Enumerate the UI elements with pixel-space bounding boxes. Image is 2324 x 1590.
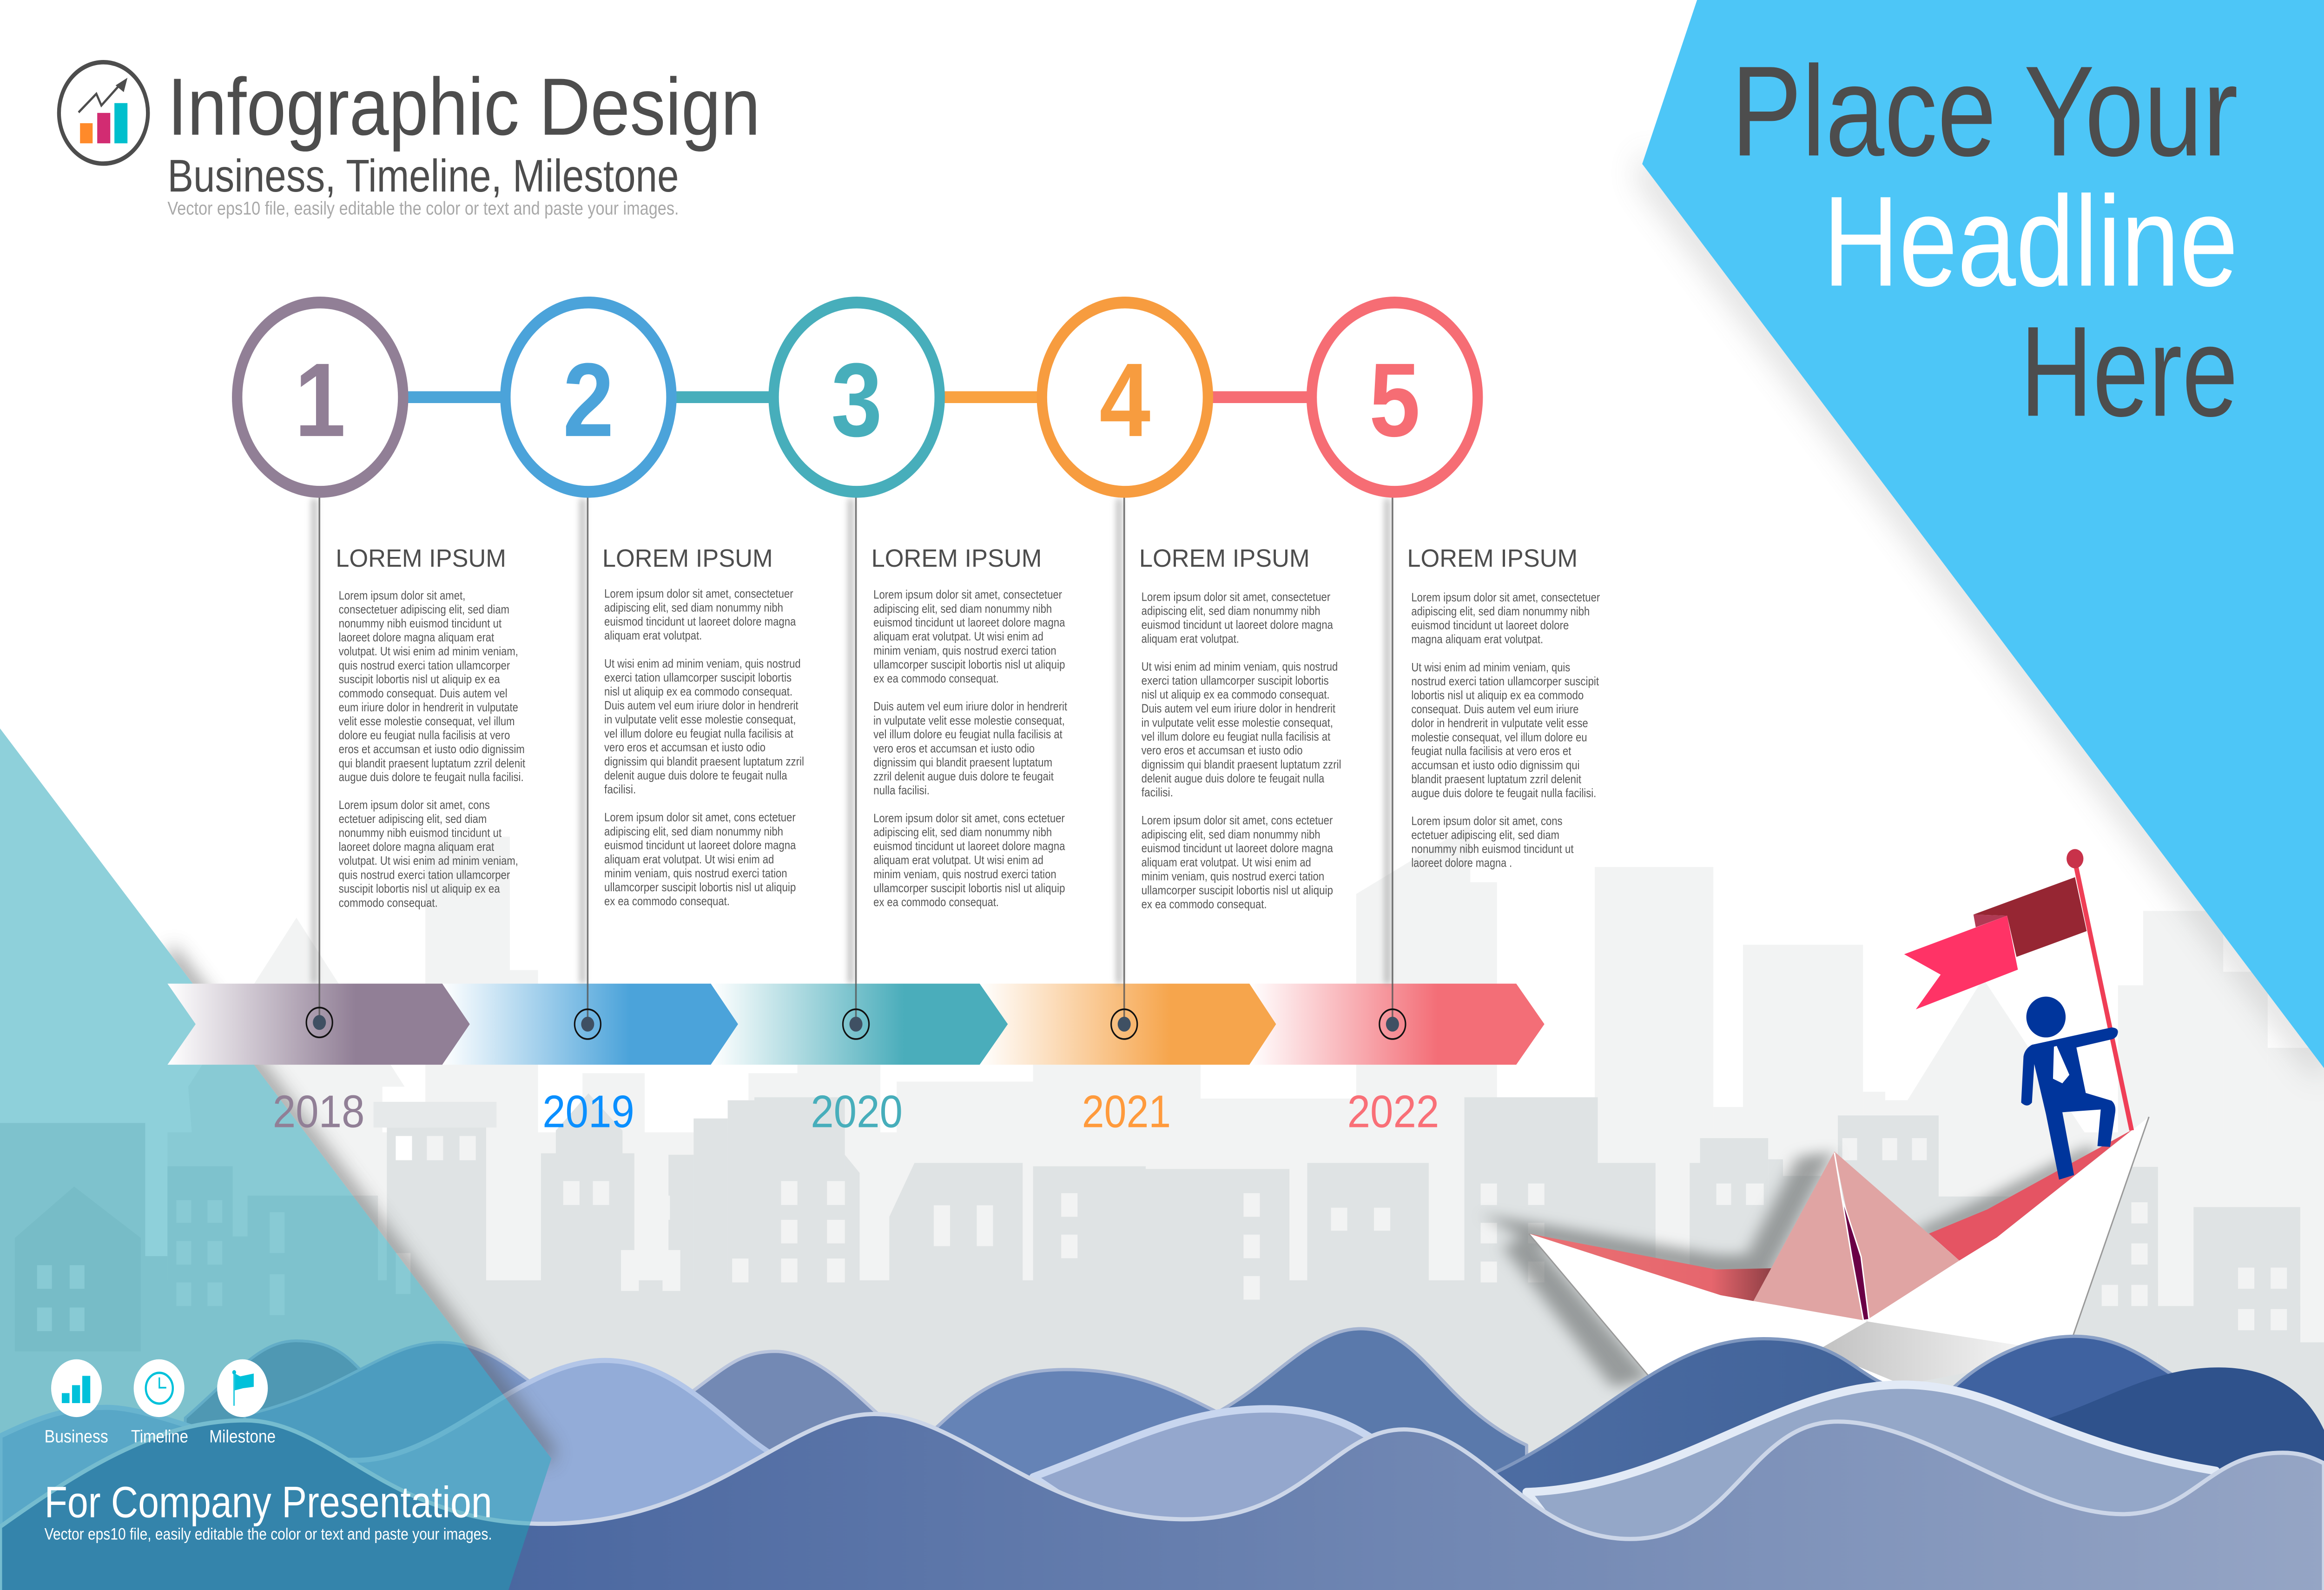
text column 5: dolor in hendrerit in vulputate velit esse [1411,717,1588,730]
text column 5: molestie consequat, vel illum dolore eu [1411,731,1587,744]
text column 1: volutpat. Ut wisi enim ad minim veniam, [339,645,518,658]
headline: Here [2020,300,2238,444]
text column 1: quis nostrud exerci tation ullamcorper [339,868,510,882]
paper boat, flag and figure [1482,849,2149,1388]
text column 4: aliquam erat volutpat. Ut wisi enim ad [1142,856,1311,869]
teal corner panel [0,729,551,1590]
text column 4: euismod tincidunt ut laoreet dolore magna [1142,618,1333,632]
text column 5: accumsan et iusto odio dignissim qui [1411,759,1580,772]
text column 4: Ut wisi enim ad minim veniam, quis nostrud [1142,660,1338,674]
text column 1: commodo consequat. [339,896,438,910]
text column 1: dolore eu feugiat nulla facilisis at vero [339,729,510,742]
year labels [273,1086,1439,1137]
text column 5: blandit praesent luptatum zzril delenit [1411,773,1581,786]
text column 2: Lorem ipsum dolor sit amet, consectetuer [604,587,793,601]
text column 4: dignissim qui blandit praesent luptatum zzril [1142,758,1341,771]
vertical line shadows [314,498,1387,984]
text column 3: ex ea commodo consequat. [873,672,999,685]
text column 2: Ut wisi enim ad minim veniam, quis nostrud [604,657,801,670]
headline panel shadow [1642,164,2324,1068]
boat: sail folds [1753,1152,1863,1320]
title: Infographic Design [167,61,760,152]
flag pole [2075,864,2132,1130]
text column 5: LOREM IPSUM [1407,544,1578,572]
text column 3: Lorem ipsum dolor sit amet, consectetuer [873,588,1062,602]
text column 1: suscipit lobortis nisl ut aliquip ex ea [339,882,500,895]
icon: business bars [51,1359,102,1417]
text column 1: eum iriure dolor in hendrerit in vulputate [339,701,518,714]
milestone circle 3 [774,303,940,492]
text column 4: ex ea commodo consequat. [1142,898,1267,911]
text column 4: Duis autem vel eum iriure dolor in hendrerit [1142,702,1335,716]
icon labels: Timeline [131,1427,188,1446]
year labels: 2018 [273,1086,364,1137]
text column 2: minim veniam, quis nostrud exerci tation [604,867,787,880]
text column 3: minim veniam, quis nostrud exerci tation [873,868,1056,881]
text column 5: Ut wisi enim ad minim veniam, quis [1411,661,1570,674]
boat: inner red folds [1529,1233,1772,1301]
text column 5: nonummy nibh euismod tincidunt ut [1411,842,1574,856]
text column 2: aliquam erat volutpat. [604,629,702,643]
year labels: 2022 [1347,1086,1439,1137]
text column 5: adipiscing elit, sed diam nonummy nibh [1411,605,1590,618]
milestone circle 5: 5 [1369,341,1420,458]
text column 3: nulla facilisi. [873,784,930,797]
text column 3: dignissim qui blandit praesent luptatum [873,756,1052,769]
text column 3: Lorem ipsum dolor sit amet, cons ectetuer [873,812,1065,825]
milestone circle 1 [237,303,403,492]
text column 2: in vulputate velit esse molestie consequat, [604,713,796,727]
text column 4: adipiscing elit, sed diam nonummy nibh [1142,828,1320,841]
text column 5: ectetuer adipiscing elit, sed diam [1411,828,1559,842]
text column 3: zzril delenit augue duis dolore te feugait [873,770,1054,783]
text column 3: Duis autem vel eum iriure dolor in hendrerit [873,700,1067,714]
text column 1: quis nostrud exerci tation ullamcorper [339,659,510,672]
text column 3: ullamcorper suscipit lobortis nisl ut aliquip [873,882,1065,895]
text column 1: augue duis dolore te feugait nulla facilisi. [339,771,524,784]
text column 4: vero eros et accumsan et iusto odio [1142,744,1303,757]
text column 4 [1139,544,1341,911]
text column 2: exerci tation ullamcorper suscipit lobortis [604,671,792,684]
figure [2027,997,2066,1038]
icon: milestone flag [217,1359,268,1417]
text column 1: laoreet dolore magna aliquam erat [339,841,494,854]
subtitle: Business, Timeline, Milestone [167,150,679,201]
text column 2: ex ea commodo consequat. [604,895,730,908]
text column 3 [872,544,1067,909]
text column 3: LOREM IPSUM [872,544,1042,572]
text column 1: qui blandit praesent luptatum zzril delenit [339,757,525,770]
text column 1: laoreet dolore magna aliquam erat [339,631,494,644]
text column 2: facilisi. [604,783,636,796]
year labels: 2019 [542,1086,634,1137]
milestone circle 2: 2 [563,341,614,458]
text column 3: euismod tincidunt ut laoreet dolore magna [873,616,1065,629]
text column 4: aliquam erat volutpat. [1142,632,1239,646]
text column 1: commodo consequat. Duis autem vel [339,687,508,700]
text column 4: delenit augue duis dolore te feugait nulla [1142,772,1324,785]
text column 1: suscipit lobortis nisl ut aliquip ex ea [339,673,500,686]
text column 3: aliquam erat volutpat. Ut wisi enim ad [873,630,1043,643]
text column 1: consectetuer adipiscing elit, sed diam [339,603,509,616]
text column 5: Lorem ipsum dolor sit amet, consectetuer [1411,591,1600,604]
text column 4: adipiscing elit, sed diam nonummy nibh [1142,604,1320,618]
waves [0,1329,2324,1590]
text column 4: Lorem ipsum dolor sit amet, consectetuer [1142,590,1330,604]
text column 2: Lorem ipsum dolor sit amet, cons ectetuer [604,811,796,824]
text column 4: facilisi. [1142,786,1173,799]
text column 4: exerci tation ullamcorper suscipit lobortis [1142,674,1329,688]
text column 1: Lorem ipsum dolor sit amet, cons [339,798,490,812]
text column 1: nonummy nibh euismod tincidunt ut [339,826,502,840]
boat shadows [1482,1145,2100,1388]
text column 1: volutpat. Ut wisi enim ad minim veniam, [339,855,518,868]
headline [1731,40,2238,444]
city skyline: front layer with windows [0,1093,2324,1590]
text column 2: adipiscing elit, sed diam nonummy nibh [604,825,783,838]
text column 3: adipiscing elit, sed diam nonummy nibh [873,602,1052,616]
text column 2: ullamcorper suscipit lobortis nisl ut aliquip [604,881,796,894]
text column 5: lobortis nisl ut aliquip ex ea commodo [1411,689,1584,702]
text column 2: adipiscing elit, sed diam nonummy nibh [604,601,783,615]
text column 5: euismod tincidunt ut laoreet dolore [1411,619,1569,632]
text column 1: eros et accumsan et iusto odio dignissim [339,743,525,756]
text column 3: adipiscing elit, sed diam nonummy nibh [873,826,1052,839]
text column 2: LOREM IPSUM [602,544,773,572]
text column 5: magna aliquam erat volutpat. [1411,633,1543,646]
text column 4: Lorem ipsum dolor sit amet, cons ectetuer [1142,814,1333,828]
logo icon [59,62,148,164]
text column 1: ectetuer adipiscing elit, sed diam [339,813,487,826]
text column 3: ex ea commodo consequat. [873,896,999,909]
text column 5: laoreet dolore magna . [1411,856,1512,870]
milestone circle 4: 4 [1099,341,1150,458]
boat: hull [1529,1233,1903,1385]
text column 2: aliquam erat volutpat. Ut wisi enim ad [604,853,774,866]
headline: Place Your [1731,40,2238,183]
text column 1: Lorem ipsum dolor sit amet, [339,589,465,603]
text column 2: Duis autem vel eum iriure dolor in hendrerit [604,699,799,712]
text column 4: in vulputate velit esse molestie consequat, [1142,716,1333,729]
text column 3: in vulputate velit esse molestie consequat, [873,714,1065,728]
stems and timeline markers [306,495,1406,1039]
presentation tagline: Vector eps10 file, easily editable the color or text and paste your images. [45,1525,492,1544]
text column 2: dignissim qui blandit praesent luptatum zzril [604,755,804,768]
text column 3: vero eros et accumsan et iusto odio [873,742,1035,755]
milestone circle 4 [1042,303,1208,492]
text column 3: minim veniam, quis nostrud exerci tation [873,644,1056,657]
text column 4: vel illum dolore eu feugiat nulla facilisis at [1142,730,1330,743]
text column 4: ullamcorper suscipit lobortis nisl ut aliquip [1142,884,1333,897]
connector lines [403,391,1316,403]
icon: timeline clock [134,1359,185,1417]
text column 4: nisl ut aliquip ex ea commodo consequat. [1142,688,1330,702]
timeline arrows [167,984,1545,1065]
text column 1 [336,544,525,910]
icon labels: Business [45,1427,108,1446]
icon labels [45,1427,276,1446]
city skyline: back layer [167,825,2324,1352]
text column 5: augue duis dolore te feugait nulla facilisi. [1411,787,1596,800]
text column 1: nonummy nibh euismod tincidunt ut [339,617,502,630]
milestone circle 5 [1312,303,1478,492]
text column 2 [602,544,804,908]
icon labels: Milestone [209,1427,276,1446]
year labels: 2020 [811,1086,903,1137]
flag [1974,877,2086,957]
text column 2: euismod tincidunt ut laoreet dolore magna [604,839,796,852]
text column 5: feugiat nulla facilisis at vero eros et [1411,745,1571,758]
text column 3: euismod tincidunt ut laoreet dolore magna [873,840,1065,853]
presentation heading: For Company Presentation [45,1478,492,1527]
text column 5: consequat. Duis autem vel eum iriure [1411,703,1578,716]
text column 2: nisl ut aliquip ex ea commodo consequat. [604,685,792,698]
teal panel shadow [169,953,551,1458]
milestone circle 3: 3 [831,341,882,458]
tagline: Vector eps10 file, easily editable the color or text and paste your images. [167,198,679,219]
text column 2: vero eros et accumsan et iusto odio [604,741,766,755]
text column 4: euismod tincidunt ut laoreet dolore magna [1142,842,1333,855]
text column 1: velit esse molestie consequat, vel illum [339,715,515,728]
milestone circle 2 [505,303,672,492]
text column 4: minim veniam, quis nostrud exerci tation [1142,870,1324,883]
text column 3: aliquam erat volutpat. Ut wisi enim ad [873,854,1043,867]
text column 2: euismod tincidunt ut laoreet dolore magna [604,615,796,629]
milestone circle 1: 1 [295,341,346,458]
text column 2: vel illum dolore eu feugiat nulla facilisis at [604,727,793,741]
year labels: 2021 [1082,1086,1171,1137]
text column 4: LOREM IPSUM [1139,544,1310,572]
headline: Headline [1823,170,2238,313]
text column 5 [1407,544,1600,870]
text column 5: Lorem ipsum dolor sit amet, cons [1411,815,1563,828]
text column 3: ullamcorper suscipit lobortis nisl ut aliquip [873,658,1065,671]
text column 5: nostrud exerci tation ullamcorper suscipit [1411,675,1599,688]
text column 2: delenit augue duis dolore te feugait nulla [604,769,787,782]
text column 3: vel illum dolore eu feugiat nulla facilisis at [873,728,1063,742]
headline panel: blue corner [1642,0,2324,1068]
text column 1: LOREM IPSUM [336,544,506,572]
